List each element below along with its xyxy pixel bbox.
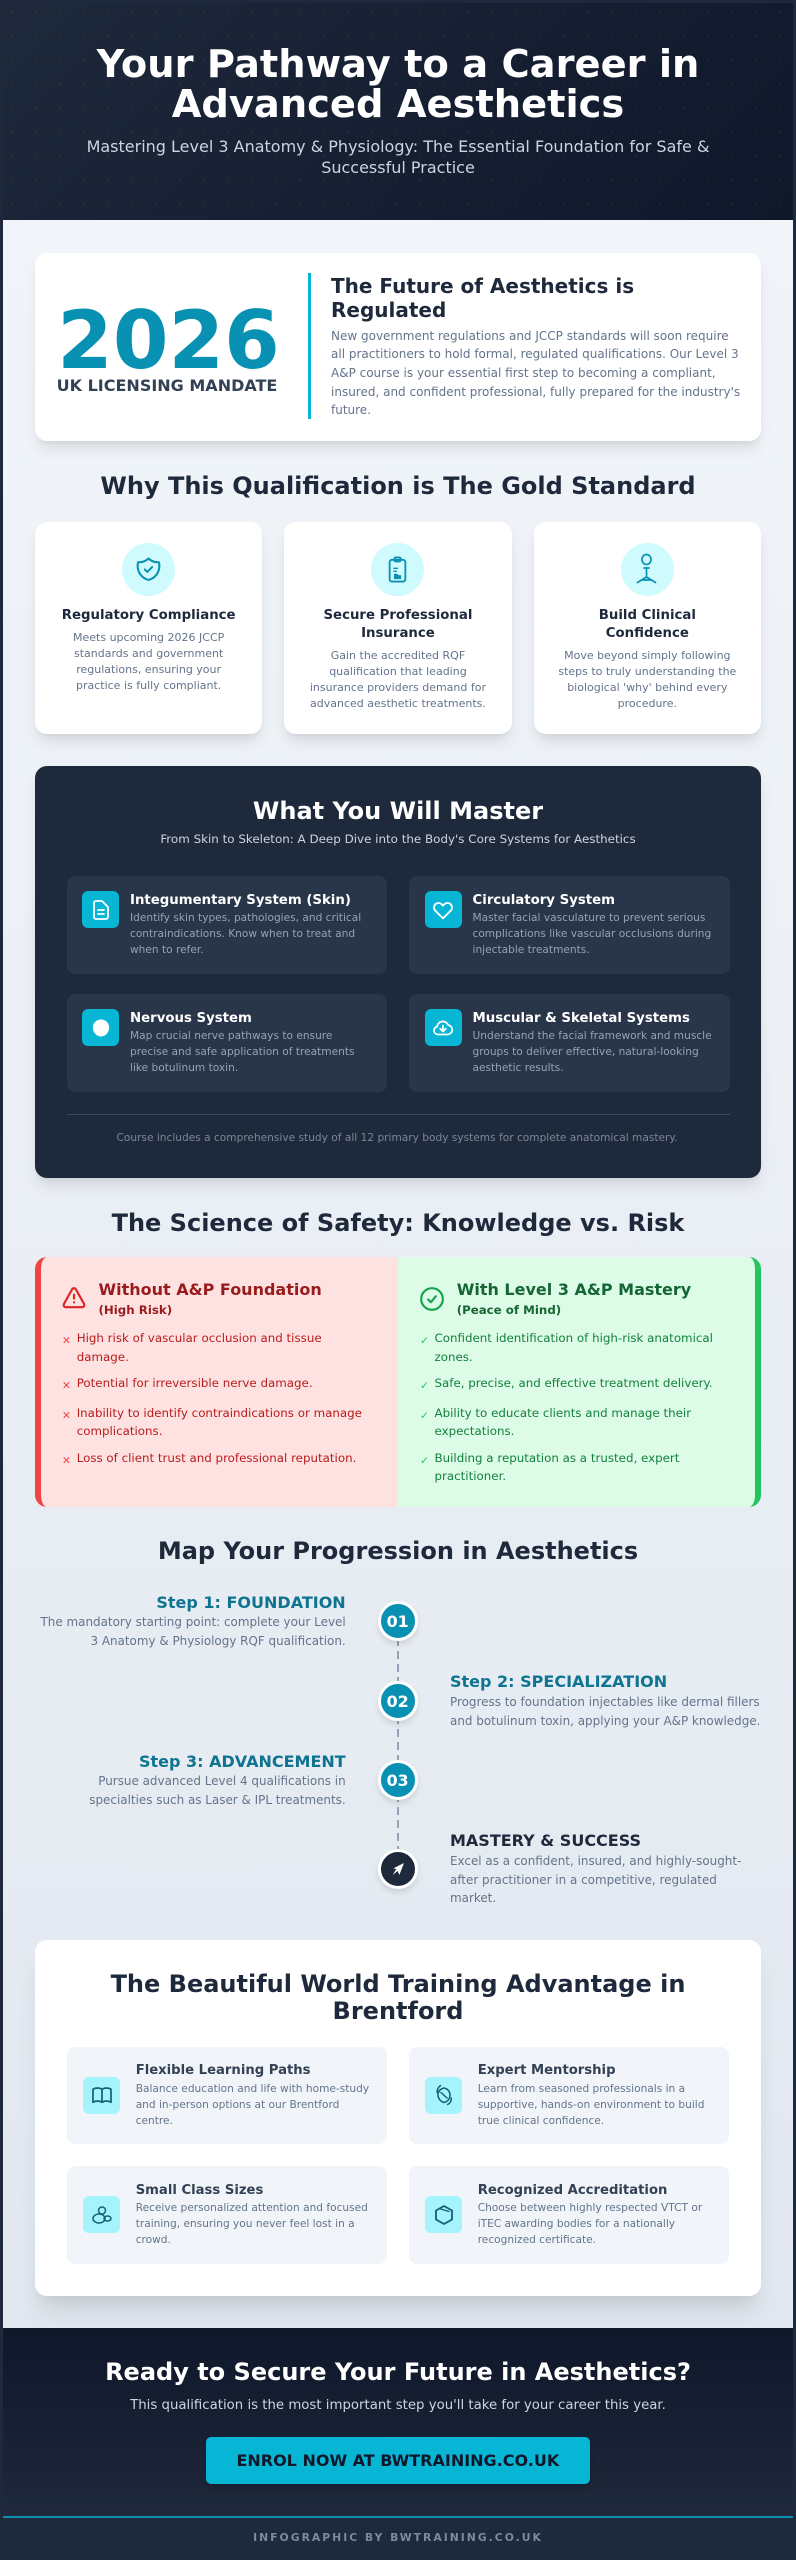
system: nervous	[66, 994, 387, 1092]
step 2 text: and botulinum toxin, applying your A&P knowledge.	[450, 1714, 760, 1728]
panel: training advantage	[35, 1940, 761, 2296]
benefit item 4	[420, 1451, 680, 1483]
step 3 marker: 03	[387, 1770, 409, 1790]
benefit item 1	[420, 1331, 713, 1364]
card text: Meets upcoming 2026 JCCP	[73, 631, 224, 644]
system: muscular and skeletal	[409, 994, 730, 1092]
benefit item 3: ✓	[420, 1410, 429, 1422]
risk item 3: Inability to identify contraindications or manage	[77, 1406, 362, 1420]
step 1 marker: 01	[387, 1612, 409, 1630]
card text: insurance providers demand for	[310, 681, 486, 694]
footer	[0, 2516, 796, 2560]
panel: 2026 licensing mandate	[35, 253, 761, 441]
system text: aesthetic results.	[472, 1062, 564, 1074]
column benefit note: (Peace of Mind)	[457, 1303, 561, 1317]
heading: What You Will Master	[253, 797, 543, 825]
system title: Nervous System	[130, 1011, 252, 1026]
heading: The Beautiful World Training Advantage in	[111, 1970, 685, 1998]
header banner	[0, 0, 796, 220]
mastery text: market.	[450, 1891, 496, 1905]
step 1 text: 3 Anatomy & Physiology RQF qualification.	[90, 1634, 346, 1648]
advantage text: iTEC awarding bodies for a nationally	[478, 2218, 675, 2230]
card title: Build Clinical	[599, 608, 696, 623]
advantage text	[478, 2083, 704, 2127]
system text	[130, 1030, 355, 1074]
column: without foundation	[35, 1257, 398, 1507]
system text: complications like vascular occlusions during	[472, 928, 711, 940]
panel: what you will master	[35, 766, 761, 1178]
card text: Move beyond simply following	[564, 649, 731, 662]
subtitle: Mastering Level 3 Anatomy & Physiology: The Essential Foundation for Safe &	[87, 137, 709, 156]
risk item 3: ✕	[62, 1410, 71, 1422]
panel: professional insurance	[284, 522, 512, 734]
cta heading: Ready to Secure Your Future in Aesthetics?	[105, 2358, 691, 2386]
icon: shield check	[122, 543, 175, 596]
card text: practice is fully compliant.	[76, 679, 221, 692]
step 3 text: specialties such as Laser & IPL treatments.	[89, 1793, 346, 1807]
icon: group	[83, 2196, 120, 2233]
icon: warning triangle	[62, 1287, 86, 1308]
step 1 text	[40, 1592, 346, 1648]
system title: Integumentary System (Skin)	[130, 893, 351, 908]
footnote: Course includes a comprehensive study of all 12 primary body systems for complete anatomical mastery.	[116, 1132, 678, 1144]
step 2 marker	[378, 1681, 418, 1721]
risk item 3: complications.	[77, 1424, 162, 1438]
card text	[558, 649, 736, 710]
enrol button: ENROL NOW AT BWTRAINING.CO.UK	[236, 2451, 559, 2470]
icon: figure on tripod	[621, 543, 674, 596]
panel: regulatory compliance	[35, 522, 262, 734]
mastery text: after practitioner in a competitive, regulated	[450, 1873, 717, 1887]
advantage text: and in-person options at our Brentford	[136, 2099, 339, 2111]
benefit item 3	[420, 1406, 692, 1438]
risk item 4: Loss of client trust and professional reputation.	[77, 1451, 356, 1465]
mandate text	[331, 328, 740, 417]
icon: circular arrows	[425, 2077, 462, 2114]
enrol button	[206, 2437, 590, 2484]
cta text: This qualification is the most important step you'll take for your career this year.	[130, 2398, 666, 2413]
card title: Insurance	[361, 626, 435, 641]
advantage title: Expert Mentorship	[478, 2063, 616, 2078]
card text: advanced aesthetic treatments.	[310, 697, 486, 710]
advantage text: supportive, hands-on environment to build	[478, 2099, 704, 2111]
card text	[310, 649, 486, 710]
advantage text: recognized certificate.	[478, 2234, 596, 2246]
step 1 text: The mandatory starting point: complete your Level	[41, 1615, 346, 1629]
system text: when to refer.	[130, 944, 204, 956]
mandate heading: The Future of Aesthetics is	[331, 274, 634, 298]
column title: Without A&P Foundation	[98, 1280, 322, 1298]
subtitle: Successful Practice	[321, 158, 475, 177]
system text: precise and safe application of treatments	[130, 1046, 355, 1058]
step 3 text: Step 3: ADVANCEMENT	[139, 1752, 346, 1770]
icon: open book	[83, 2077, 120, 2114]
risk item 1: damage.	[77, 1350, 129, 1364]
system text: contraindications. Know when to treat and	[130, 928, 355, 940]
heading: gold standard: Why This Qualification is The Gold Standard	[100, 472, 696, 500]
mandate text: insured, and confident professional, fully prepared for the industry's	[331, 385, 740, 399]
benefit item 2: ✓	[420, 1380, 429, 1392]
system text: Map crucial nerve pathways to ensure	[130, 1030, 332, 1042]
title: Advanced Aesthetics	[172, 82, 624, 127]
vertical accent line	[308, 273, 311, 419]
step 3 text: Pursue advanced Level 4 qualifications in	[98, 1774, 346, 1788]
benefit item 4: ✓	[420, 1455, 429, 1467]
mandate heading	[331, 274, 634, 322]
mandate text: New government regulations and JCCP standards will soon require	[331, 328, 729, 342]
icon: filled drop	[82, 1009, 119, 1046]
icon: document	[82, 891, 119, 928]
advantage text	[478, 2202, 702, 2246]
benefit item 4: practitioner.	[434, 1469, 506, 1483]
advantage: accreditation	[409, 2166, 729, 2264]
call to action band	[0, 2328, 796, 2517]
step 2 text: Progress to foundation injectables like dermal fillers	[450, 1695, 760, 1709]
column: with mastery	[398, 1257, 761, 1507]
icon: check circle	[420, 1287, 444, 1311]
icon: heart	[424, 891, 462, 928]
mandate text: future.	[331, 403, 371, 417]
risk item 2: Potential for irreversible nerve damage.	[77, 1376, 313, 1390]
mastery text: MASTERY & SUCCESS	[450, 1831, 641, 1850]
advantage title: Recognized Accreditation	[478, 2183, 667, 2198]
system text: Identify skin types, pathologies, and critical	[130, 912, 361, 924]
system: circulatory	[409, 876, 730, 974]
big year: 2026	[57, 294, 280, 387]
advantage: flexible learning	[67, 2047, 387, 2144]
risk item 3	[62, 1406, 362, 1438]
mastery text: Excel as a confident, insured, and highly-sought-	[450, 1854, 741, 1868]
card text: steps to truly understanding the	[558, 665, 736, 678]
system text: Master facial vasculature to prevent serious	[472, 912, 705, 924]
benefit item 3: expectations.	[434, 1424, 514, 1438]
card text: qualification that leading	[329, 665, 467, 678]
benefit item 3: Ability to educate clients and manage their	[434, 1406, 691, 1420]
heading: progression: Map Your Progression in Aesthetics	[158, 1537, 638, 1565]
mandate text: all practitioners to hold formal, regulated qualifications. Our Level 3	[331, 347, 739, 361]
advantage text: crowd.	[136, 2234, 171, 2246]
icon: cloud download	[424, 1009, 462, 1046]
advantage text: centre.	[136, 2115, 173, 2127]
advantage text: Balance education and life with home-study	[136, 2083, 369, 2095]
advantage: small classes	[67, 2166, 387, 2264]
card title: Confidence	[606, 626, 689, 641]
system text	[472, 1030, 712, 1074]
benefit item 2: Safe, precise, and effective treatment delivery.	[434, 1376, 713, 1390]
system text: Understand the facial framework and muscle	[472, 1030, 712, 1042]
advantage text: Learn from seasoned professionals in a	[478, 2083, 685, 2095]
card text: biological 'why' behind every	[567, 681, 727, 694]
subheading: From Skin to Skeleton: A Deep Dive into the Body's Core Systems for Aesthetics	[160, 832, 636, 846]
advantage title: Small Class Sizes	[136, 2183, 263, 2198]
system text	[472, 912, 711, 956]
risk item 2: ✕	[62, 1380, 71, 1392]
advantage text	[136, 2202, 368, 2246]
card text: standards and government	[74, 647, 223, 660]
heading: science of safety: The Science of Safety: Knowledge vs. Risk	[112, 1209, 684, 1237]
system title: Circulatory System	[472, 893, 615, 908]
title	[96, 42, 699, 127]
card text: Gain the accredited RQF	[331, 649, 465, 662]
advantage title: Flexible Learning Paths	[136, 2063, 311, 2078]
mastery text	[450, 1831, 741, 1905]
icon: hexagon badge	[425, 2196, 462, 2233]
step 2 text	[450, 1672, 760, 1728]
panel: clinical confidence	[534, 522, 761, 734]
card title: Regulatory Compliance	[62, 608, 236, 623]
heading: Brentford	[333, 1997, 463, 2025]
column risk note: (High Risk)	[98, 1303, 172, 1317]
benefit item 1: ✓	[420, 1335, 429, 1347]
card text	[73, 631, 224, 692]
step 1 text: Step 1: FOUNDATION	[156, 1592, 346, 1612]
advantage text: Receive personalized attention and focused	[136, 2202, 368, 2214]
subtitle	[87, 137, 709, 177]
step 2 text: Step 2: SPECIALIZATION	[450, 1672, 667, 1691]
title: Your Pathway to a Career in	[97, 42, 699, 87]
step 3 marker	[378, 1760, 418, 1800]
step 3 text	[89, 1752, 346, 1807]
risk item 1: High risk of vascular occlusion and tissue	[77, 1331, 322, 1345]
heading	[110, 1970, 685, 2025]
timeline: career progression	[40, 1592, 760, 1905]
icon: clipboard	[371, 543, 424, 596]
mandate label: UK LICENSING MANDATE	[57, 376, 277, 394]
advantage text	[136, 2083, 369, 2127]
advantage text: Choose between highly respected VTCT or	[478, 2202, 702, 2214]
system text: like botulinum toxin.	[130, 1062, 238, 1074]
card title	[323, 608, 472, 641]
column title: With Level 3 A&P Mastery	[457, 1280, 691, 1298]
footer credit: INFOGRAPHIC BY BWTRAINING.CO.UK	[253, 2531, 543, 2544]
advantage text: true clinical confidence.	[478, 2115, 604, 2127]
system text: groups to deliver effective, natural-looking	[472, 1046, 699, 1058]
benefit item 1: zones.	[434, 1350, 473, 1364]
risk item 1	[62, 1331, 322, 1364]
panel: knowledge vs risk comparison	[35, 1257, 761, 1507]
card text: regulations, ensuring your	[76, 663, 221, 676]
step 1 marker	[378, 1601, 418, 1641]
card title	[599, 608, 696, 641]
step 2 marker: 02	[387, 1692, 409, 1710]
benefit item 1: Confident identification of high-risk anatomical	[434, 1331, 713, 1345]
mandate heading: Regulated	[331, 298, 446, 322]
card title: Secure Professional	[323, 608, 472, 623]
advantage text: training, ensuring you never feel lost in a	[136, 2218, 355, 2230]
system title: Muscular & Skeletal Systems	[472, 1011, 690, 1026]
advantage: expert mentorship	[409, 2047, 729, 2144]
mastery marker with arrow icon	[378, 1849, 418, 1889]
connector line	[397, 1640, 399, 1850]
benefit item 4: Building a reputation as a trusted, expert	[434, 1451, 679, 1465]
system text	[130, 912, 361, 956]
risk item 4: ✕	[62, 1455, 71, 1467]
system: integumentary	[66, 876, 387, 974]
system text: injectable treatments.	[472, 944, 590, 956]
mandate text: A&P course is your essential first step to becoming a compliant,	[331, 366, 716, 380]
risk item 1: ✕	[62, 1335, 71, 1347]
card text: procedure.	[618, 697, 677, 710]
